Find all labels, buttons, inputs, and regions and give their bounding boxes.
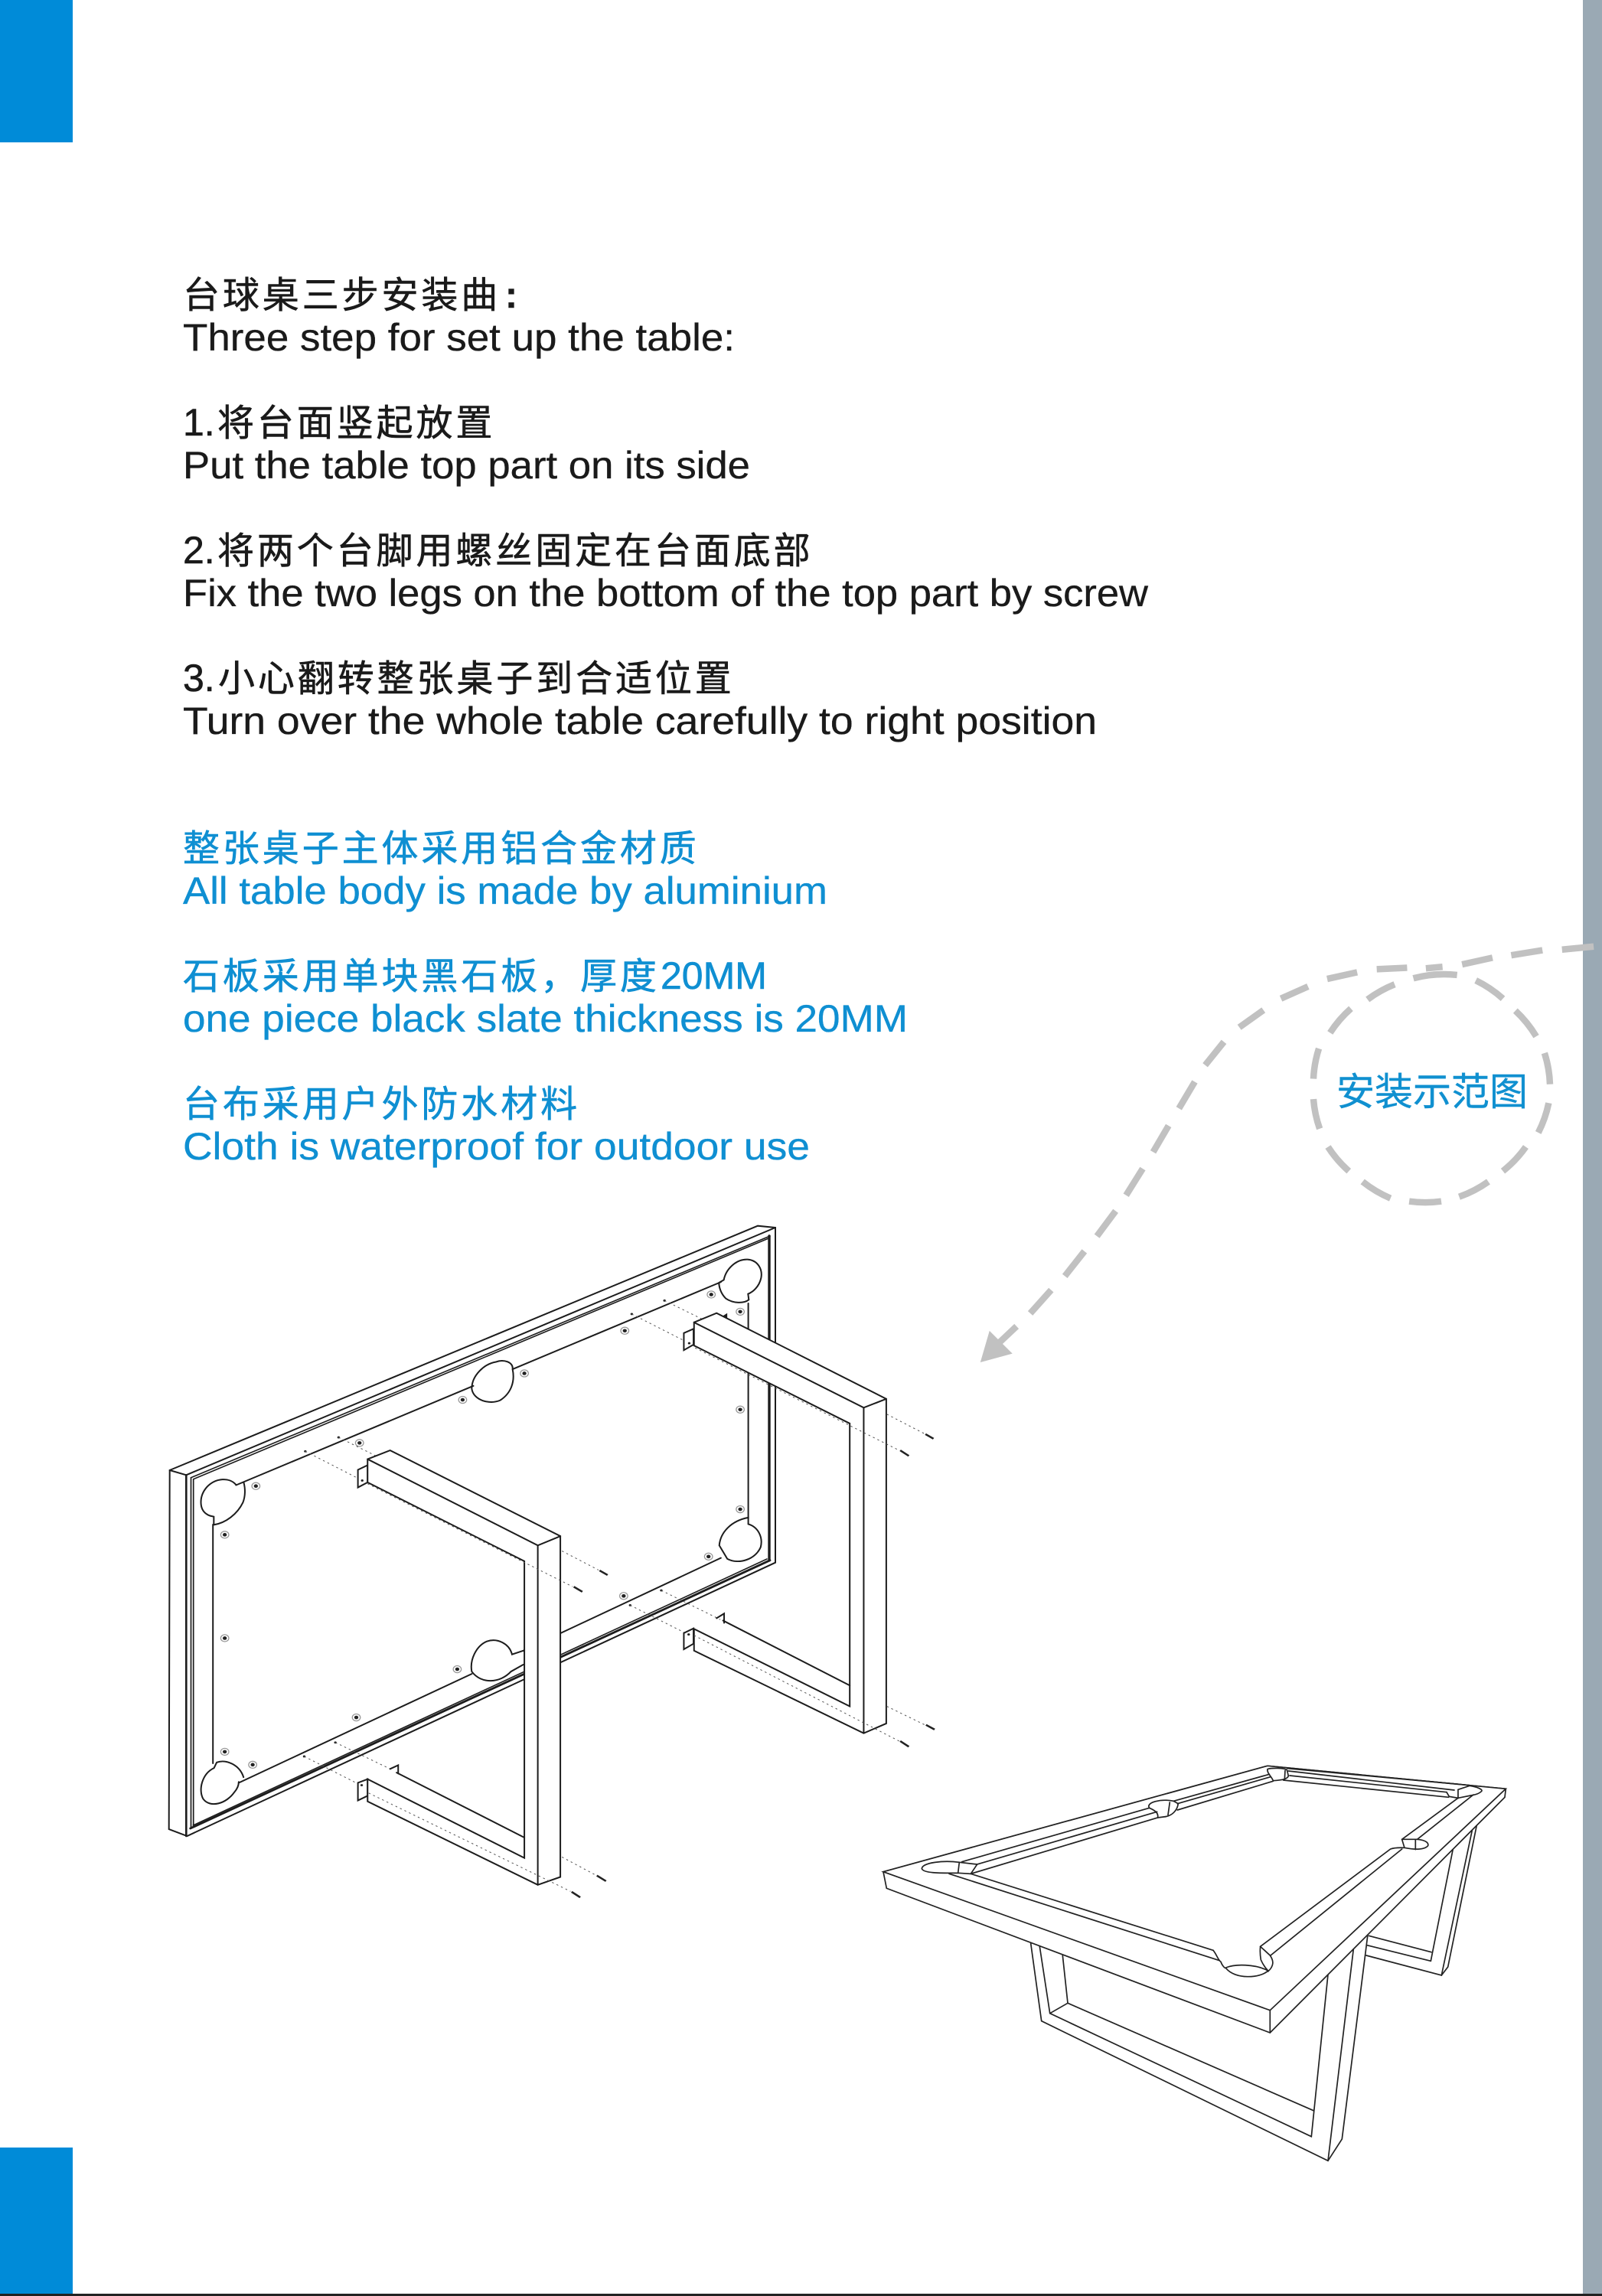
bed rail edges: [201, 1282, 762, 1804]
step 3 Chinese: 3.: [183, 657, 215, 700]
material note 3 English: Cloth is waterproof for outdoor use: [183, 1125, 810, 1168]
pocket middle bottom: [471, 1640, 524, 1681]
step 3 English: Turn over the whole table carefully to right position: [183, 700, 1097, 742]
right grey side bar: [1583, 0, 1602, 2294]
near rail: [971, 1874, 1213, 1950]
guide lines through legs: [367, 1348, 925, 1891]
diagram: assembled billiard table: [883, 1766, 1506, 2161]
far side rail lines: [1284, 1769, 1470, 1797]
bracket dots: [361, 1342, 690, 1786]
left cushions and pockets: [922, 1800, 1178, 1874]
heading Chinese: 台球桌三步安装曲: [183, 276, 501, 316]
material note 2 English: one piece black slate thickness is 20MM: [183, 997, 908, 1040]
heading Chinese: :: [505, 276, 517, 316]
top left blue tab: [0, 0, 73, 142]
pocket middle top: [471, 1361, 514, 1402]
right side pocket: [1402, 1839, 1428, 1849]
material note 1 Chinese: 整张桌子主体采用铝合金材质: [183, 829, 700, 869]
right leg: [684, 1313, 886, 1733]
dashed guide lines behind legs: [304, 1300, 723, 1786]
near corner pocket: [1213, 1946, 1273, 1977]
bottom left blue tab: [0, 2148, 73, 2294]
pocket bottom left: [201, 1761, 243, 1804]
right rail: [1402, 1795, 1473, 1839]
material note 3 Chinese: 台布采用户外防水材料: [183, 1084, 580, 1125]
table top frame: [169, 1226, 775, 1836]
far and right cushions and pockets: [1261, 1768, 1482, 1955]
dashed circle: [1313, 974, 1550, 1202]
material note 1 English: All table body is made by aluminium: [183, 869, 827, 912]
step 2 Chinese: 2.: [183, 529, 215, 572]
heading English: Three step for set up the table:: [183, 316, 735, 359]
callout: dashed circle with label and arrow: [980, 947, 1594, 1362]
pocket bottom right: [719, 1518, 762, 1561]
material note 2 Chinese: 石板采用单块黑石板，厚度: [183, 957, 660, 997]
step 1 Chinese: 将台面竖起放置: [217, 403, 495, 444]
text block: material notes: [183, 829, 908, 1168]
diagram: exploded table top and legs: [169, 1226, 935, 1897]
far leg: [1366, 1825, 1476, 1975]
side pocket far: [1149, 1800, 1178, 1818]
far middle pocket: [1268, 1768, 1288, 1781]
screws: [572, 1434, 935, 1897]
material note 2 Chinese: 20MM: [661, 954, 767, 997]
callout label: 安装示范图: [1336, 1062, 1528, 1117]
far right corner pocket: [1447, 1786, 1482, 1798]
step 2 Chinese: 将两个台脚用螺丝固定在台面底部: [217, 531, 814, 572]
step 1 Chinese: 1.: [183, 401, 215, 444]
left leg: [358, 1450, 560, 1885]
pocket top right: [719, 1260, 762, 1303]
step 2 English: Fix the two legs on the bottom of the top part by screw: [183, 572, 1149, 615]
near leg: [1031, 1936, 1368, 2161]
step 1 English: Put the table top part on its side: [183, 444, 750, 487]
table top slab: [883, 1766, 1506, 2033]
pocket top left: [201, 1479, 245, 1525]
corner pocket left: [922, 1861, 977, 1874]
screw holes: [220, 1291, 744, 1768]
bottom dark edge line: [0, 2294, 1602, 2296]
dashed curved arrow: [980, 947, 1594, 1362]
text block: installation steps: [183, 276, 1149, 742]
step 3 Chinese: 小心翻转整张桌子到合适位置: [218, 659, 735, 700]
